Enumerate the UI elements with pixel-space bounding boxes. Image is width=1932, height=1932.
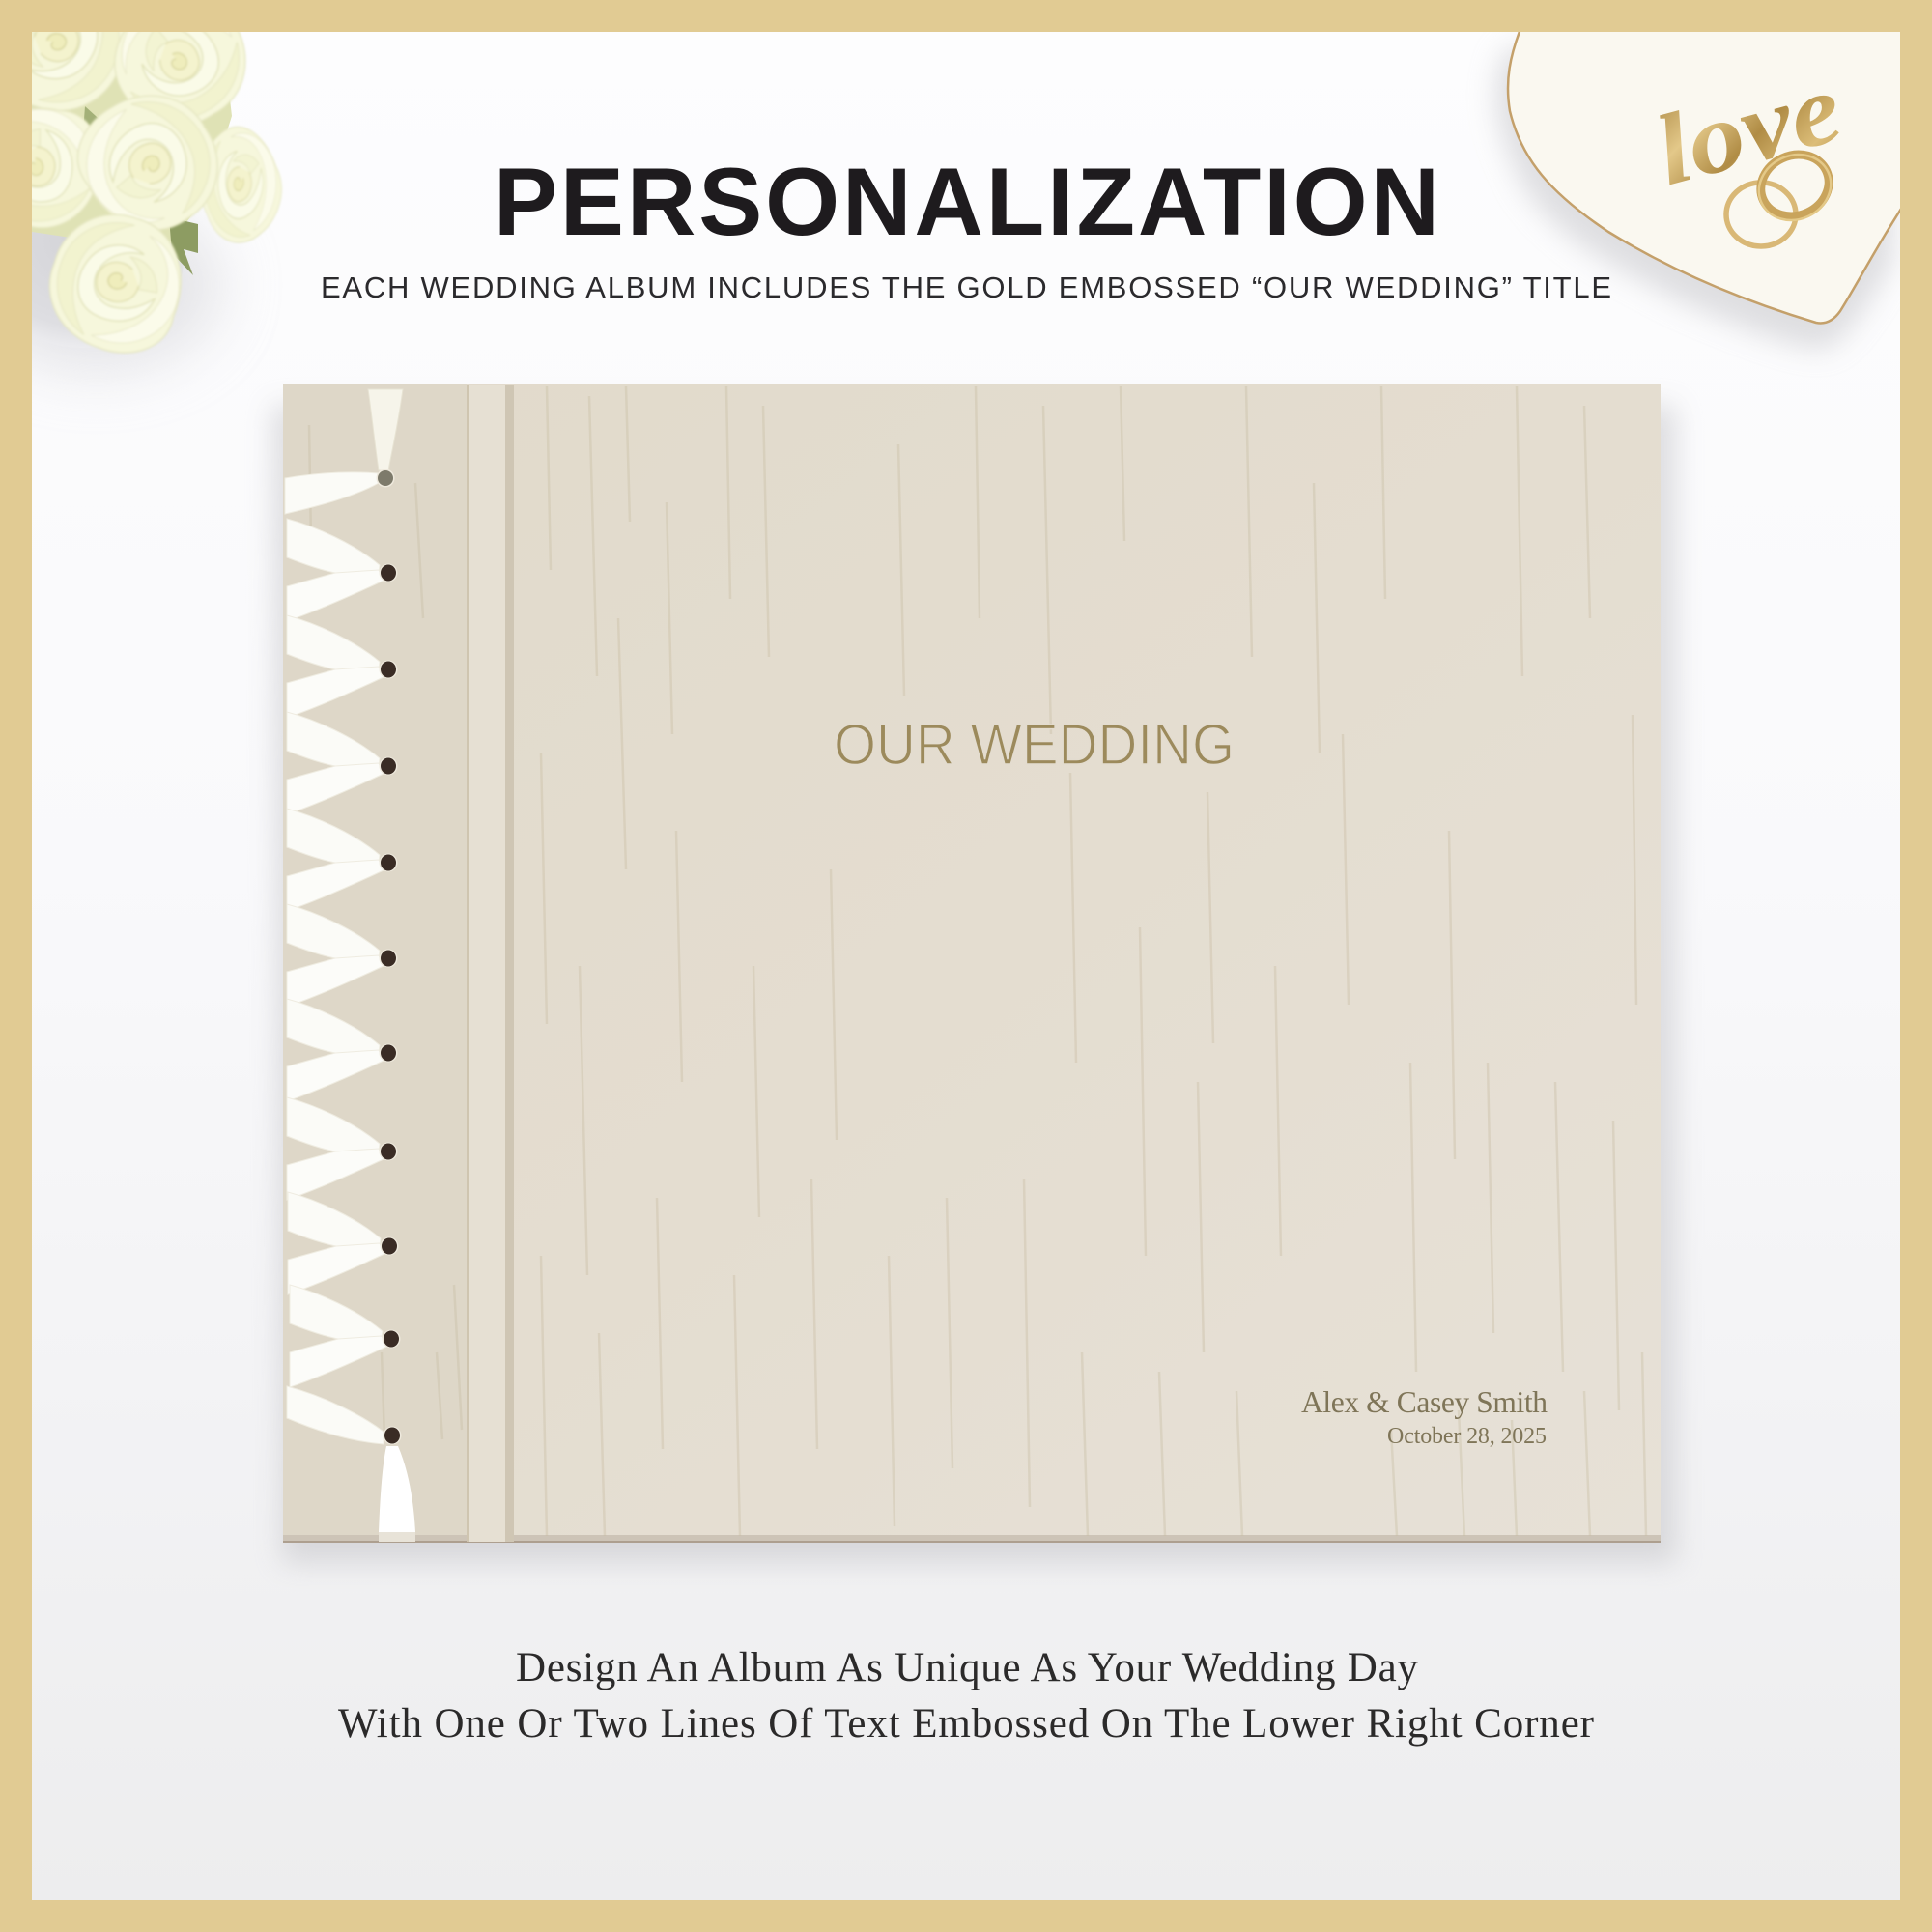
cover board <box>283 384 1661 1543</box>
bottom board edge <box>283 1535 1661 1543</box>
spine strip <box>469 385 505 1542</box>
album drop shadow <box>272 406 1676 1563</box>
ribbon lacing <box>285 469 402 1445</box>
silk texture streaks <box>309 386 1646 1536</box>
love lettering: love <box>1644 51 1852 207</box>
spine groove <box>505 385 514 1542</box>
title: PERSONALIZATION <box>494 148 1439 255</box>
embossed names: Alex & Casey Smith <box>1301 1385 1548 1419</box>
caption line two: With One Or Two Lines Of Text Embossed On The Lower Right Corner <box>338 1701 1594 1747</box>
photo: heart dish with love lettering and rings <box>1495 19 1918 350</box>
bottom ribbon tail <box>379 1446 415 1532</box>
top ribbon tail <box>368 389 403 470</box>
album cover <box>283 384 1661 1543</box>
wedding rings <box>1726 143 1841 246</box>
left spine panel tint <box>283 384 467 1543</box>
subtitle: EACH WEDDING ALBUM INCLUDES THE GOLD EMBOSSED “OUR WEDDING” TITLE <box>321 270 1611 304</box>
cover title: OUR WEDDING <box>834 713 1235 777</box>
photo: white roses in bowl <box>32 32 283 382</box>
embossed date: October 28, 2025 <box>1387 1424 1547 1449</box>
caption line one: Design An Album As Unique As Your Wedding Day <box>516 1645 1418 1690</box>
